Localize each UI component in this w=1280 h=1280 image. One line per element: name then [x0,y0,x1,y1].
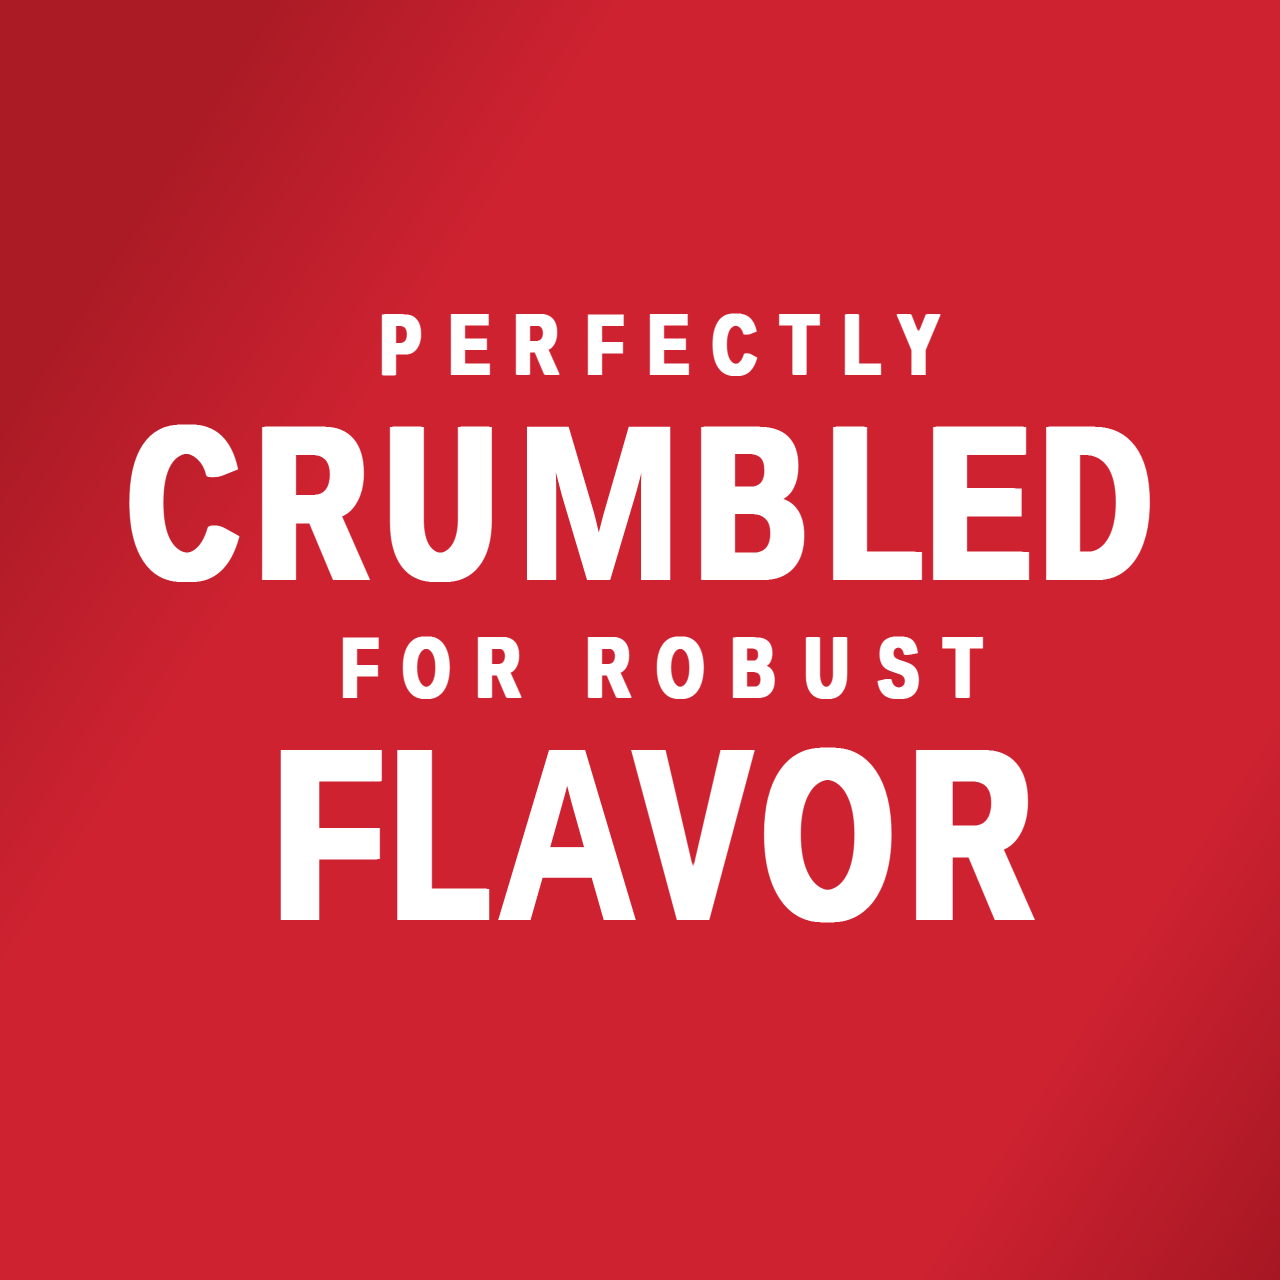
text: CRUMBLED [130,382,1150,625]
text: CRUMBLED: CRU [130,383,495,625]
text: CRUMBLED: M [515,382,682,625]
text: FLAVOR: F [276,702,381,969]
text: PERFECTLY: PERFECTLY [381,296,938,393]
text: FLAVOR: V [635,700,751,969]
text: FOR ROBUST: FOR ROBUST [342,619,981,716]
text: FLAVOR: A [496,700,638,969]
text: CRUMBLED: BLED [697,383,1150,625]
text: FLAVOR: OR [764,700,1031,969]
headline [130,296,1150,969]
text: FLAVOR: L [393,700,488,969]
text: FLAVOR [276,700,1031,969]
